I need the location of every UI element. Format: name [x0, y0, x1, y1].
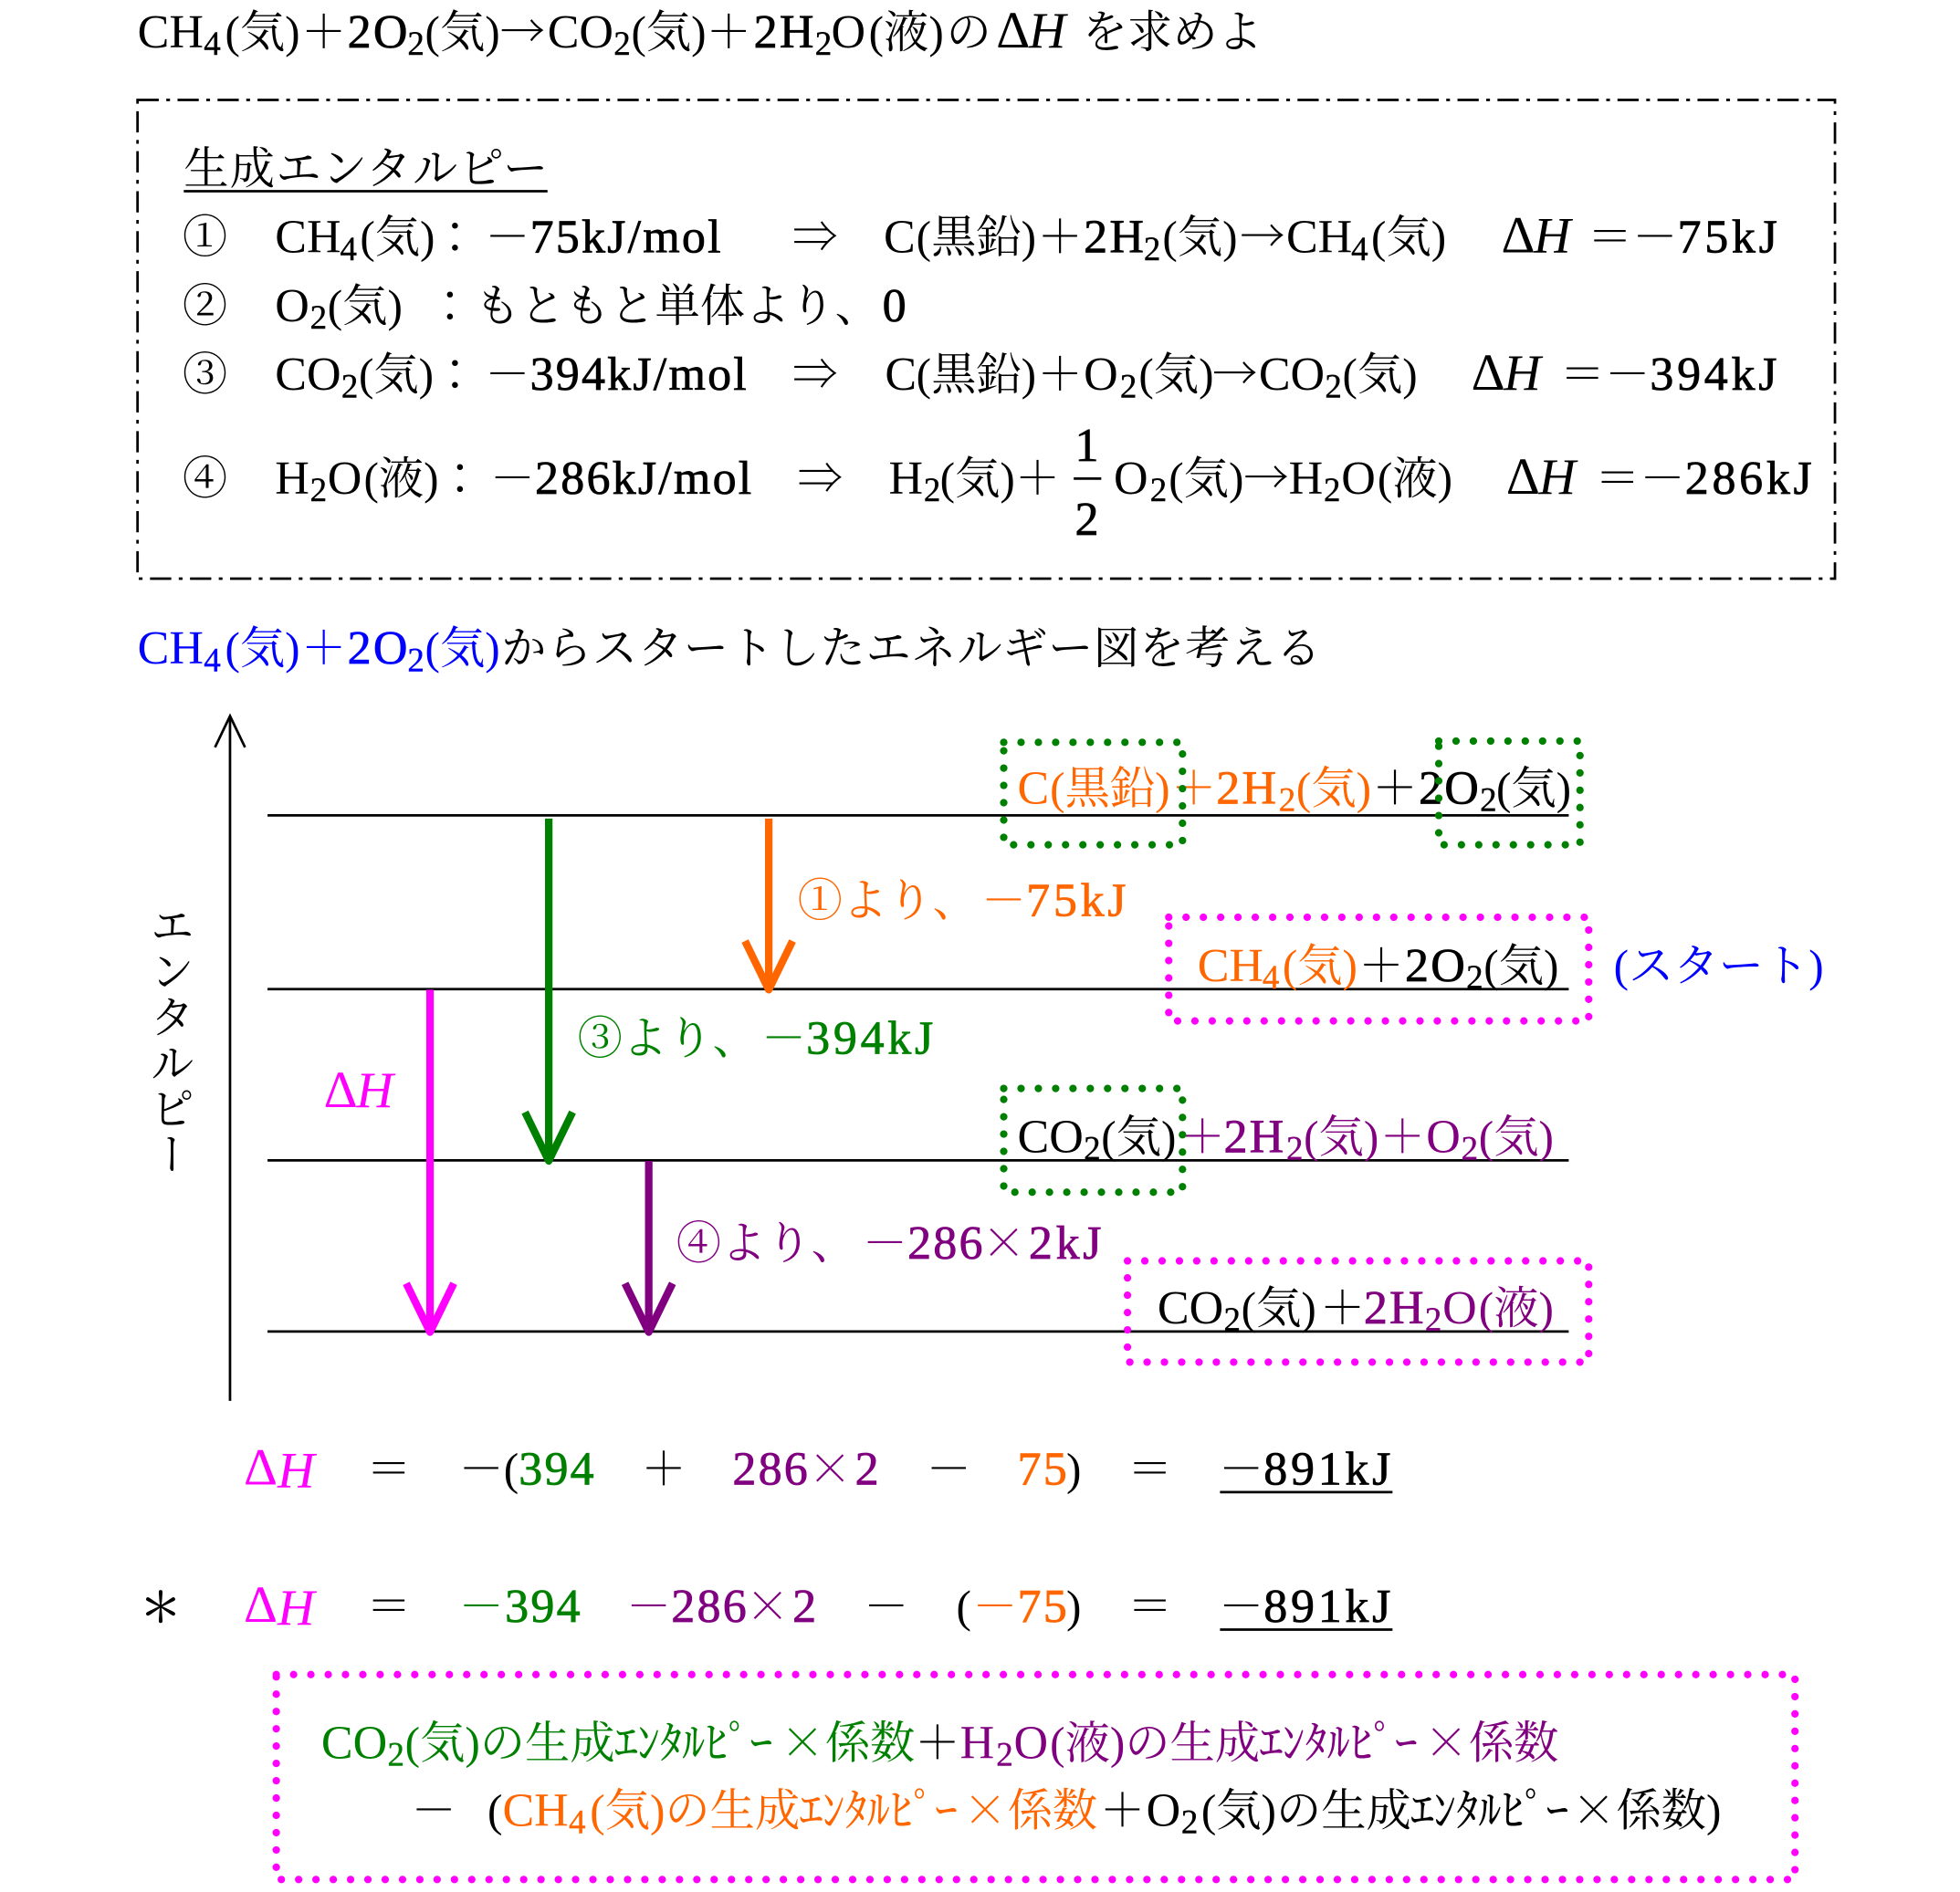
- level 3 formula: O: [1426, 1111, 1461, 1163]
- line 4: H2O: ＋: [1015, 454, 1060, 504]
- equation 2: ＝: [1127, 1582, 1172, 1632]
- words line 2: －: [412, 1785, 456, 1835]
- equation 2: 891kJ: [1263, 1581, 1394, 1633]
- equation 2: [140, 1571, 1394, 1636]
- line 1: CH4: ⇒: [792, 213, 837, 263]
- level 3 formula: CO: [1018, 1111, 1084, 1163]
- line 3: CO2: (気): [359, 350, 434, 400]
- line 4: H2O: →: [1243, 443, 1289, 507]
- line 3: CO2: O: [1084, 349, 1118, 401]
- label: minus 394: 394kJ: [806, 1012, 937, 1064]
- title: question: 2: [613, 25, 631, 62]
- equation 1: －: [459, 1445, 504, 1495]
- equation 2: 394: [505, 1581, 582, 1633]
- level 2 formula: (気): [1483, 941, 1558, 991]
- level 2 formula: 2O: [1405, 940, 1467, 992]
- words line 2: ): [1706, 1785, 1721, 1835]
- equation 1: 2: [855, 1444, 881, 1496]
- green box: O2: [1439, 741, 1580, 845]
- line 2: O2: O: [275, 280, 309, 332]
- equation 1: ×: [808, 1434, 853, 1499]
- line 3: CO2: ＋: [1037, 350, 1083, 400]
- arrow: H2O step: [625, 1161, 673, 1333]
- line 3: CO2: ：: [433, 350, 477, 400]
- section heading: ＋: [301, 623, 346, 674]
- line 1: CH4: (気): [360, 213, 435, 263]
- line 4: H2O: 2: [1150, 471, 1167, 508]
- words line 1: 係数: [1469, 1718, 1558, 1768]
- line 3: CO2: C: [885, 349, 917, 401]
- level 2 formula: 2: [1466, 958, 1483, 996]
- line 1: CH4: →: [1240, 202, 1285, 267]
- line 4: H2O: ：: [437, 454, 483, 504]
- line 4: H2O: 286kJ: [1685, 453, 1816, 505]
- level 1 formula: 2: [1480, 781, 1497, 819]
- line 4: H2O: O: [1114, 453, 1148, 505]
- level 1 formula: (気): [1296, 763, 1371, 813]
- level 4 formula: (気): [1242, 1283, 1316, 1333]
- label: minus 286 x 2: 2kJ: [1029, 1218, 1105, 1270]
- level 1 formula: (気): [1496, 763, 1571, 813]
- label: minus 394: ③より、: [578, 1013, 758, 1063]
- level 2 formula: 4: [1263, 958, 1279, 996]
- words line 1: 係数: [825, 1718, 915, 1768]
- equation 1: (: [504, 1445, 519, 1495]
- line 1: CH4: ＝: [1588, 213, 1632, 263]
- axis label: エンタルピー: [143, 903, 194, 1176]
- words line 1: ×: [1424, 1707, 1469, 1772]
- panel heading: 生成エンタルピー: [183, 143, 549, 193]
- label: minus 75: －: [981, 876, 1026, 926]
- words line 1: O: [1013, 1717, 1048, 1769]
- arrow: delta H: [406, 989, 454, 1333]
- line 4: H2O: (気): [1169, 454, 1243, 504]
- equation 1: ＝: [1127, 1445, 1172, 1495]
- line 1: CH4: 75kJ: [1678, 212, 1781, 264]
- equation 2: (: [956, 1582, 971, 1632]
- section heading: 2: [407, 641, 424, 678]
- line 1: CH4: (黒鉛): [917, 213, 1036, 263]
- words line 2: (気)の生成ｴﾝﾀﾙﾋﾟｰ: [590, 1785, 958, 1835]
- level 2 formula: CH: [1198, 940, 1263, 992]
- equation 1: [244, 1434, 1394, 1499]
- line 3: CO2: (気): [1138, 350, 1214, 400]
- line 4: H2O: Δ: [1506, 448, 1540, 506]
- words line 2: 4: [569, 1803, 586, 1841]
- level 1 formula: C: [1018, 762, 1049, 814]
- label: minus 394: －: [761, 1013, 806, 1063]
- level 3 formula: 2H: [1223, 1111, 1285, 1163]
- equation 1: 286: [732, 1444, 810, 1496]
- line 1: CH4: 2: [1144, 230, 1160, 267]
- line 1: CH4: (気): [1162, 213, 1238, 263]
- level 3 formula: (気): [1101, 1112, 1176, 1162]
- level lines: [267, 815, 1568, 1332]
- line 3: CO2: 2: [341, 367, 358, 404]
- line 2: O2: もともと単体より、: [475, 281, 880, 331]
- equation 2: H: [277, 1580, 318, 1636]
- arrow: CH4 step: [745, 819, 792, 989]
- words line 1: 2: [387, 1736, 404, 1773]
- line 1: CH4: (気): [1371, 213, 1446, 263]
- panel: formation enthalpy data: [138, 100, 1835, 579]
- start label: (スタート): [1614, 941, 1824, 991]
- level 4 formula: 2H: [1364, 1282, 1426, 1334]
- words line 2: 2: [1181, 1803, 1198, 1841]
- title: question: Δ: [996, 2, 1030, 59]
- level 3 formula: (気): [1479, 1112, 1554, 1162]
- line 2: O2: ②: [183, 281, 227, 331]
- fraction one half: 2: [1075, 494, 1101, 546]
- label: minus 286 x 2: ④より、: [676, 1218, 856, 1269]
- line 3: CO2: 2: [1120, 367, 1137, 404]
- line 4: H2O: H: [275, 453, 309, 505]
- equation 2: ×: [745, 1571, 790, 1636]
- level 3 formula: 2: [1084, 1130, 1101, 1167]
- line 1: CH4: Δ: [1501, 207, 1535, 265]
- line 4: H2O: H: [1538, 449, 1579, 506]
- magenta box: products: [1127, 1261, 1588, 1362]
- level 4 formula: O: [1442, 1282, 1477, 1334]
- words line 2: 係数: [1008, 1785, 1097, 1835]
- words line 2: ×: [962, 1774, 1008, 1839]
- line 3: CO2: (黒鉛): [917, 350, 1036, 400]
- arrow: CO2 step: [525, 819, 572, 1161]
- title: question: (気): [225, 7, 300, 57]
- title: question: 4: [204, 25, 221, 62]
- section heading: 4: [204, 641, 221, 678]
- line 3: CO2: －: [1605, 350, 1650, 400]
- words line 1: (気)の生成ｴﾝﾀﾙﾋﾟｰ: [405, 1718, 772, 1768]
- line 4: H2O: (液): [1378, 454, 1452, 504]
- words line 2: ×: [1571, 1774, 1616, 1839]
- equation 1: Δ: [244, 1439, 278, 1497]
- title: question: ＋: [707, 7, 751, 57]
- words line 1: ＋: [915, 1718, 960, 1768]
- line 4: H2O: ⇒: [798, 454, 843, 504]
- line 3: CO2: ③: [183, 350, 227, 400]
- words line 2: (気)の生成ｴﾝﾀﾙﾋﾟｰ: [1201, 1785, 1568, 1835]
- line 1: CH4: －: [1632, 213, 1678, 263]
- line 4: H2O: H: [1289, 453, 1323, 505]
- label: minus 286 x 2: ×: [981, 1207, 1026, 1272]
- equation 1: ＝: [366, 1445, 412, 1495]
- level 1 formula: ＋: [1372, 763, 1418, 813]
- level 4 formula: 2: [1425, 1301, 1441, 1338]
- title: question: 2H: [754, 6, 816, 58]
- level 4 formula: 2: [1223, 1301, 1241, 1338]
- title: question: 2O: [348, 6, 410, 58]
- title: question: を求めよ: [1083, 7, 1263, 57]
- equation 2: ＝: [366, 1582, 412, 1632]
- line 1: CH4: －: [485, 213, 530, 263]
- title: question: H: [1028, 3, 1069, 59]
- equation 1: 891kJ: [1263, 1444, 1394, 1496]
- title: question: 2: [815, 25, 832, 62]
- line 3: CO2: →: [1212, 339, 1257, 403]
- equation 1: －: [1219, 1445, 1263, 1495]
- words line 2: 係数: [1616, 1785, 1706, 1835]
- label: minus 286 x 2: 286: [907, 1218, 985, 1270]
- label: delta H: H: [355, 1062, 396, 1119]
- section heading: (気): [425, 623, 500, 674]
- line 1: CH4: 4: [340, 230, 357, 267]
- fraction one half: [1074, 420, 1101, 546]
- title: question: (気): [425, 7, 500, 57]
- words line 2: O: [1147, 1784, 1180, 1836]
- label: minus 75: ①より、: [798, 876, 978, 926]
- equation 1: 394: [519, 1444, 596, 1496]
- equation 1: 75: [1018, 1444, 1069, 1496]
- green box: CO2: [1004, 1089, 1182, 1192]
- section heading: 2O: [348, 622, 410, 674]
- level 1 formula: 2: [1279, 781, 1295, 819]
- line 4: H2O: －: [490, 454, 535, 504]
- level 1 formula: 2O: [1419, 762, 1481, 814]
- equation 1: －: [927, 1445, 971, 1495]
- line 4: H2O: 2: [310, 471, 327, 508]
- equation 2: 75: [1018, 1581, 1069, 1633]
- title: question: O: [832, 6, 865, 58]
- section heading: からスタートしたエネルギー図を考える: [501, 623, 1322, 674]
- line 1: CH4: CH: [1286, 212, 1352, 264]
- words line 1: (液)の生成ｴﾝﾀﾙﾋﾟｰ: [1050, 1718, 1418, 1768]
- title: question: ＋: [301, 7, 346, 57]
- line 4: H2O: 2: [1324, 471, 1341, 508]
- line 1: CH4: ：: [433, 213, 477, 263]
- title: question: (気): [631, 7, 707, 57]
- level 3 formula: ＋: [1180, 1112, 1225, 1162]
- line 1: CH4: CH: [275, 212, 341, 264]
- section heading: CH: [138, 622, 204, 674]
- line 4: H2O: 286kJ/mol: [535, 453, 753, 505]
- line 3: CO2: ＝: [1560, 350, 1605, 400]
- title: question: 2: [407, 25, 424, 62]
- fraction one half: 1: [1075, 420, 1101, 472]
- level 4 formula: CO: [1158, 1282, 1223, 1334]
- equation 1: ＋: [641, 1445, 687, 1495]
- line 4: H2O: O: [1341, 453, 1376, 505]
- green box: graphite: [1004, 742, 1182, 845]
- title: question: CO: [548, 6, 613, 58]
- equation 2: ): [1066, 1582, 1081, 1632]
- line 3: CO2: CO: [1259, 349, 1325, 401]
- line 4: H2O: 2: [924, 471, 940, 508]
- level 1 formula: ＋: [1171, 763, 1216, 813]
- level 2 formula: ＋: [1358, 941, 1404, 991]
- line 1: CH4: 75kJ/mol: [530, 212, 723, 264]
- equation 2: －: [972, 1582, 1018, 1632]
- equation 2: －: [459, 1582, 504, 1632]
- words line 1: 2: [996, 1736, 1013, 1773]
- line 1: CH4: C: [884, 212, 916, 264]
- level 3 formula: 2: [1286, 1130, 1303, 1167]
- level 1 formula: 2H: [1216, 762, 1278, 814]
- line 3: CO2: －: [485, 350, 530, 400]
- title: question: の: [947, 7, 991, 57]
- level 3 formula: ＋: [1380, 1112, 1425, 1162]
- panel: formula in words: [277, 1675, 1795, 1879]
- line 1: CH4: ①: [183, 213, 227, 263]
- equation 2: 286: [671, 1581, 749, 1633]
- line 4: H2O: O: [328, 453, 362, 505]
- words line 1: H: [960, 1717, 994, 1769]
- equation 2: 2: [792, 1581, 818, 1633]
- label: delta H: Δ: [324, 1061, 358, 1119]
- line 4: H2O: －: [1640, 454, 1685, 504]
- words line 1: CO: [321, 1717, 387, 1769]
- energy diagram: [143, 716, 1824, 1401]
- line 4: H2O: ④: [183, 454, 227, 504]
- equation 2: Δ: [244, 1576, 278, 1634]
- line 4: H2O: ＝: [1595, 454, 1640, 504]
- line 1: CH4: 4: [1351, 230, 1368, 267]
- line 2: O2: (気): [328, 281, 403, 331]
- equation 2: ＊: [140, 1574, 182, 1634]
- section heading: (気): [225, 623, 300, 674]
- words line 2: ＋: [1100, 1785, 1145, 1835]
- line 3: CO2: 394kJ: [1650, 349, 1780, 401]
- line 4: H2O: [183, 420, 1816, 546]
- level 4 formula: ＋: [1320, 1283, 1365, 1333]
- line 2: O2: 2: [310, 298, 327, 336]
- line 2: O2: ：: [427, 281, 473, 331]
- line 4: H2O: H: [889, 453, 923, 505]
- level 1 formula: (黒鉛): [1050, 763, 1170, 813]
- line 3: CO2: ⇒: [792, 350, 837, 400]
- axis arrow: [215, 716, 245, 1401]
- line 1: CH4: 2H: [1084, 212, 1146, 264]
- line 2: O2: 0: [883, 280, 908, 332]
- line 3: CO2: (気): [1343, 350, 1418, 400]
- line 3: CO2: 2: [1325, 367, 1342, 404]
- line 1: CH4: ＋: [1037, 213, 1083, 263]
- equation 2: －: [626, 1582, 671, 1632]
- level 2 formula: (気): [1283, 941, 1357, 991]
- line 1: CH4: H: [1533, 208, 1574, 265]
- line 3: CO2: CO: [275, 349, 341, 401]
- line 4: H2O: (気): [940, 454, 1015, 504]
- label: minus 75: 75kJ: [1026, 875, 1129, 927]
- line 3: CO2: H: [1503, 345, 1544, 402]
- words line 2: (: [487, 1785, 502, 1835]
- level 3 formula: 2: [1462, 1130, 1478, 1167]
- level 3 formula: (気): [1304, 1112, 1378, 1162]
- level 4 formula: (液): [1479, 1283, 1554, 1333]
- equation 2: －: [864, 1582, 908, 1632]
- title: question: (液): [869, 7, 944, 57]
- words line 2: CH: [502, 1784, 569, 1836]
- title: question: CH: [138, 6, 204, 58]
- line 4: H2O: (液): [363, 454, 439, 504]
- equation 2: －: [1219, 1582, 1263, 1632]
- line 3: CO2: 394kJ/mol: [530, 349, 749, 401]
- equation 1: H: [277, 1442, 318, 1499]
- equation 1: ): [1066, 1445, 1081, 1495]
- magenta box: start: [1169, 917, 1588, 1021]
- line 3: CO2: Δ: [1472, 344, 1505, 402]
- label: minus 286 x 2: －: [863, 1218, 907, 1269]
- words line 1: ×: [780, 1707, 825, 1772]
